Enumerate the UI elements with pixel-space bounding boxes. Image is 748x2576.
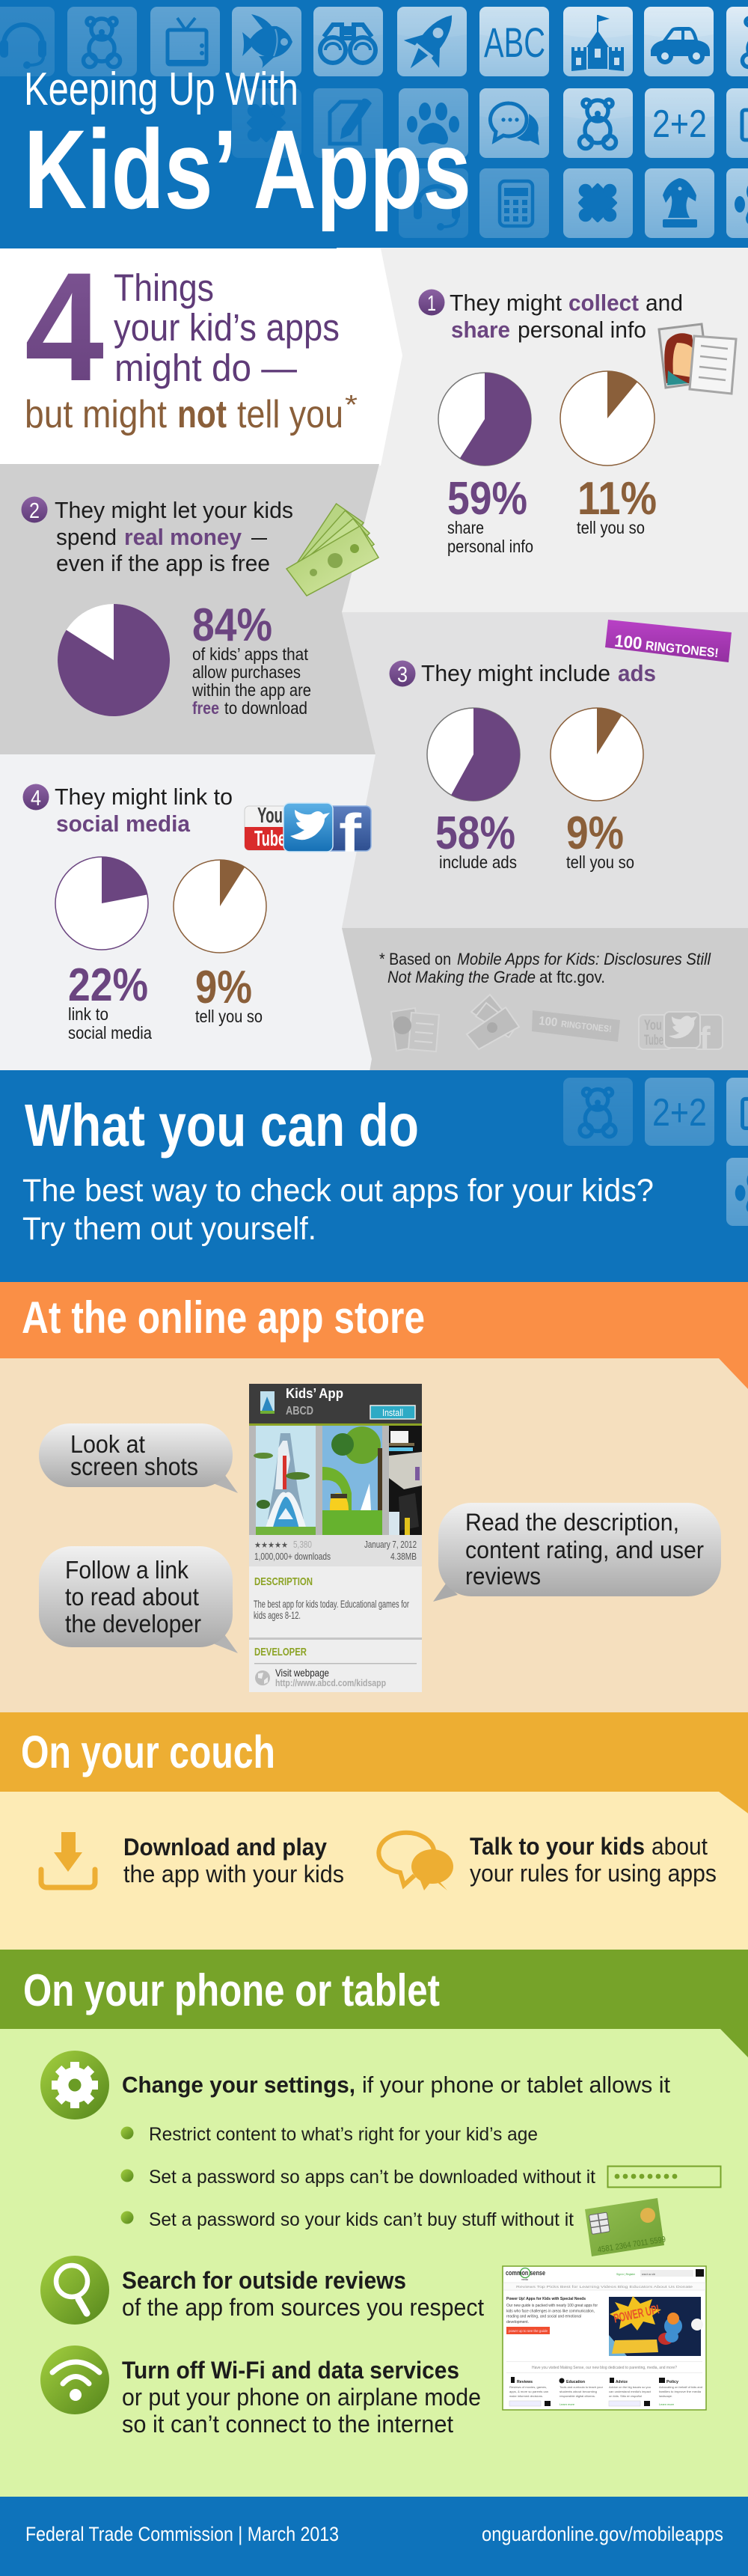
icon: credit card [585,2198,666,2256]
stat 84%: within the app are [191,680,311,700]
footnote text: Mobile Apps for Kids: Disclosures Still [457,950,711,968]
bullet: password for purchases: Set a password so your kids can’t buy stuff without it [149,2209,574,2230]
site columns: Reviews of movies, games, [509,2385,547,2389]
badge 3 [389,660,416,687]
site columns: landscape. [659,2394,672,2398]
game screenshot: platformer [322,1426,382,1535]
site columns [509,2377,702,2406]
heading 1: collect [568,290,639,316]
site blog line: Have you visited Making Sense, our new blog dedicated to parenting, media, and more? [532,2366,677,2370]
panel: what you can do [0,1070,748,1283]
icon: social media logos: Tube [254,827,286,851]
icon: dollar bills [274,497,380,596]
panel 1: collect and share [337,248,748,614]
icon: wifi [40,2345,109,2414]
speech bubble: description: Read the description, [465,1509,679,1536]
title [24,64,471,232]
footnote text: * Based on [379,950,451,968]
heading 4 [55,784,233,837]
talk text: your rules for using apps [470,1860,717,1887]
footer: Federal Trade Commission | March 2013 [25,2523,339,2545]
ratings text: 4.38MB [390,1551,417,1562]
speech bubble: developer: the developer [65,1610,201,1638]
game screenshot: tower [254,1426,316,1535]
stat 84%: to download [224,698,307,718]
search reviews text [122,2267,484,2321]
site navigation: Reviews Top Picks Best for Learning Videos Blog Educators About Us Donate [516,2285,693,2289]
website screenshot: Sign in | Register [616,2272,636,2276]
section intro text [22,1173,654,1247]
badge 2: 2 [29,499,40,523]
panel 2: real money [0,464,380,754]
heading 1: personal info [518,317,646,343]
site columns: Advice on the big issues so you [609,2385,651,2389]
description block [254,1575,409,1621]
app store screenshot: Kids’ App [286,1386,343,1401]
panel: intro white [0,240,402,466]
download text [123,1834,344,1887]
speech bubble: description [433,1503,721,1602]
speech bubble: screen shots: screen shots [70,1453,198,1480]
stat 84%: of kids’ apps that [192,644,309,664]
wifi text: or put your phone on airplane mode [122,2384,481,2411]
icon: headset [0,25,46,69]
heading 3: ads [618,660,656,686]
badge 1: 1 [427,292,436,316]
icon: paw tile [399,88,468,158]
section intro text: Try them out yourself. [22,1211,316,1247]
heading 1: and [646,290,683,316]
icon: faint bear tile [563,1078,633,1146]
footnote text: at ftc.gov. [539,968,605,986]
icon: settings gear [40,2051,109,2119]
icon: fish tile [232,7,301,76]
site feature text: Power Up! Apps for Kids with Special Needs [506,2297,586,2301]
section intro text: The best way to check out apps for your kids? [22,1173,654,1209]
heading 1: They might [450,290,562,316]
title: Keeping Up With [24,64,298,115]
intro subline: not [177,393,227,436]
power up image: POWER UP! [613,2302,660,2326]
stat 9%: 9% [195,962,252,1013]
icon: headset faint tile [399,168,468,238]
ratings text: ★★★★★ [254,1541,288,1550]
icon: faint person card [391,1008,439,1052]
site columns: on kids. Sitio en español [609,2394,642,2398]
site feature text: Our new guide is packed with nearly 100 great apps for [506,2304,598,2308]
icon: tablet tile [726,88,748,158]
app store screenshot [249,1384,422,1692]
intro subline: * [345,389,358,420]
intro headline: might do — [114,347,297,389]
site logo [506,2268,545,2281]
icon: talk bubbles [378,1833,453,1890]
icon: faint ringtones banner: 100 [538,1015,558,1029]
pie chart: 84% [58,604,170,716]
power up image [609,2296,703,2356]
site columns: Advice [616,2380,628,2384]
stat 84%: allow purchases [192,662,301,682]
icon: faint paw tile [726,1158,748,1226]
icon: credit card: 4581 2364 7011 5599 [597,2235,666,2255]
speech bubble: screen shots [39,1423,238,1493]
stat 11%: tell you so [577,518,645,537]
app icon [260,1391,275,1414]
intro headline: your kid’s apps [114,306,340,349]
stat 22%: 22% [68,959,148,1011]
site columns: Reviews [517,2380,533,2384]
icon: person card and document [659,324,736,394]
pie chart: 58% include ads [427,708,520,801]
heading 4: They might link to [55,784,233,810]
panel: on your phone or tablet [0,1950,748,2497]
footnote text [379,950,711,986]
badge 4: 4 [31,787,41,811]
icon: rocket tile [393,1,470,82]
speech bubble: description: reviews [465,1563,541,1590]
icon: faint 2+2 tile [645,1078,714,1146]
change settings text: if your phone or tablet allows it [362,2072,670,2098]
ratings text: January 7, 2012 [364,1539,417,1550]
icon: note and pencil tile [313,88,383,158]
wifi text [122,2357,481,2438]
icon: faint ringtones banner: RINGTONES! [560,1019,612,1034]
panel: footnote [337,928,748,1072]
icon: social media logos: f [339,804,362,864]
icon: faint ringtones banner [532,1010,620,1042]
heading 4: social media [56,811,191,837]
footnote text: Not Making the Grade [387,968,536,986]
icon: faint social icons: You [644,1018,662,1034]
pie chart: 9% tell [551,708,643,801]
site feature text: reading and writing, and social and emotional [506,2314,581,2319]
site columns: responsible digital citizens. [560,2394,595,2398]
heading 1: share [451,317,510,343]
panel 4: social media [0,754,375,1072]
site columns: Education [566,2380,586,2384]
stat 84%: 84% [192,599,272,651]
icon: social media logos [245,803,371,864]
intro headline [114,266,340,389]
bullet: restrict content: Restrict content to what’s right for your kid’s age [149,2124,538,2145]
download text: Download and play [123,1834,327,1861]
ratings text: 5,380 [293,1539,312,1550]
app store screenshot: ABCD [286,1405,313,1417]
talk text [470,1833,717,1887]
stat 58%: 58% [435,808,515,859]
site feature text [506,2297,598,2334]
stat 22%: link to [68,1004,108,1024]
developer block: Visit webpage [275,1667,329,1679]
section header bar: At the online app store [22,1292,425,1343]
site columns: Policy [666,2380,679,2384]
badge 1 [419,289,444,316]
section header bar: On your couch [21,1727,275,1777]
icon: binoculars tile [313,7,383,76]
icon: chess knight tile [645,168,714,238]
icon: download [41,1832,95,1887]
stat 59% [447,473,533,556]
icon: faint 2+2 tile: 2+2 [652,1091,707,1135]
heading 1 [450,290,683,343]
stat 58%: include ads [439,852,517,872]
site columns: apps, & more so parents can [509,2390,548,2393]
site feature text: kids who face challenges in areas like communication, [506,2310,595,2314]
change settings text [122,2072,670,2098]
panel 3: ads [337,612,748,930]
icon: chat tile [479,88,549,158]
description block: DESCRIPTION [254,1575,313,1588]
ringtones banner: RINGTONES! [645,638,720,660]
stat 59%: share [447,518,484,537]
description block: The best app for kids today. Educational games for [254,1598,409,1610]
site columns: can understand media's impact [609,2390,652,2393]
developer block [254,1646,417,1688]
site columns: make informed decisions. [509,2394,543,2398]
intro subline: but might [25,393,167,436]
icon: television tile [150,7,220,76]
section heading: What you can do [25,1092,419,1159]
site feature text: development. [506,2320,529,2325]
icon: magnifying glass [40,2256,109,2325]
heading 2 [55,497,293,576]
ringtones banner: 100 [613,631,643,653]
pie chart: 59% share [438,373,531,466]
icon: ABC tile: ABC [484,19,545,66]
stat 59%: personal info [447,537,533,556]
password field [607,2166,721,2187]
ringtones banner [605,620,732,662]
stat 22%: social media [68,1023,152,1043]
section header bar [0,1282,748,1389]
developer block: DEVELOPER [254,1646,307,1658]
download text: the app with your kids [123,1861,344,1887]
stat 84% [191,599,311,718]
icon: faint social icons: Tube [644,1033,663,1049]
talk text: about [652,1833,708,1860]
icon: 2+2 tile: 2+2 [652,103,707,146]
section header bar [0,1712,748,1813]
icon: car tile [644,7,714,76]
icon: paw edge tile [726,168,748,238]
icon: castle tile [563,7,633,76]
install button: Install [382,1407,403,1418]
badge 2 [21,497,48,523]
icon: ABC tile [479,7,549,76]
stat 9%: 9% [566,808,624,859]
section header bar: On your phone or tablet [23,1965,440,2015]
icon: faint social icons: f [699,1020,711,1057]
icon: teddy bear tile [67,7,137,76]
site columns: families to improve the media [659,2390,702,2393]
section header bar [0,1950,748,2057]
site columns: Advocating on behalf of kids and [659,2385,702,2389]
site columns: Learn more [659,2402,675,2406]
stat 9%: tell you so [566,852,634,872]
pie chart: 11% tell [560,371,654,466]
game screenshot: jungle [389,1426,422,1535]
search reviews text: of the app from sources you respect [122,2294,484,2321]
stat 22% [68,959,152,1043]
wifi text: so it can’t connect to the internet [122,2411,453,2438]
bullet: password for downloads: Set a password so apps can’t be downloaded without it [149,2167,595,2188]
site feature text: power up to see the guide [509,2329,548,2333]
speech bubble: description: content rating, and user [465,1536,704,1563]
big number four: 4 [25,240,104,413]
icon: puzzle faint tile [232,88,301,158]
heading 3: They might include [421,660,610,686]
site logo: common sense [506,2269,545,2277]
icon: teddy bear tile row two [563,88,633,158]
site columns: Learn more [560,2402,575,2406]
icon: faint social icons [639,1012,723,1057]
speech bubble: screen shots: Look at [70,1430,145,1458]
ratings text [254,1539,417,1562]
intro headline: Things [114,266,214,309]
site logo: media [521,2277,529,2281]
stat 11%: 11% [577,473,657,525]
heading 2: spend [56,524,117,550]
stat 84%: free [192,698,219,718]
website screenshot: search our site [642,2272,656,2276]
change settings text: Change your settings, [122,2072,355,2098]
icon: teddy bear edge tile [726,7,748,76]
icon: faint tablet tile [726,1078,748,1146]
speech bubble: developer [39,1546,238,1653]
panel: on your couch [0,1712,748,1950]
panel: online app store [0,1282,748,1712]
icon: social media logos: You [257,804,283,828]
title: Kids’ Apps [24,106,471,232]
intro subline [25,389,358,436]
site columns: Tools and curricula to teach your [560,2385,604,2389]
install button [370,1405,415,1419]
icon: 2+2 tile [645,88,714,158]
heading 2: — [251,524,267,550]
speech bubble: developer: to read about [65,1583,199,1611]
stat 59%: 59% [447,473,527,525]
pie chart: 9% tell [174,860,266,953]
badge 3: 3 [397,663,408,687]
heading 2: even if the app is free [56,550,270,576]
ratings text: 1,000,000+ downloads [254,1551,331,1562]
website screenshot [503,2266,706,2410]
talk text: Talk to your kids [470,1833,645,1860]
header panel [0,0,748,249]
icon: faint money [467,995,519,1049]
icon: calculator tile [479,168,549,238]
intro subline: tell you [237,393,343,436]
site columns: students about becoming [560,2390,597,2393]
pie chart: 22% link [55,857,148,950]
description block: kids ages 8-12. [254,1609,301,1621]
wifi text: Turn off Wi-Fi and data services [122,2357,459,2384]
footer [0,2497,748,2576]
icon: puzzle tile [563,168,633,238]
icon: headset tile [0,7,55,76]
heading 2: They might let your kids [55,497,293,523]
search reviews text: Search for outside reviews [122,2267,406,2294]
developer block: http://www.abcd.com/kidsapp [275,1677,386,1688]
badge 4 [22,784,49,811]
speech bubble: developer: Follow a link [65,1556,188,1584]
stat 9%: tell you so [195,1007,263,1026]
heading 2: real money [124,524,242,550]
